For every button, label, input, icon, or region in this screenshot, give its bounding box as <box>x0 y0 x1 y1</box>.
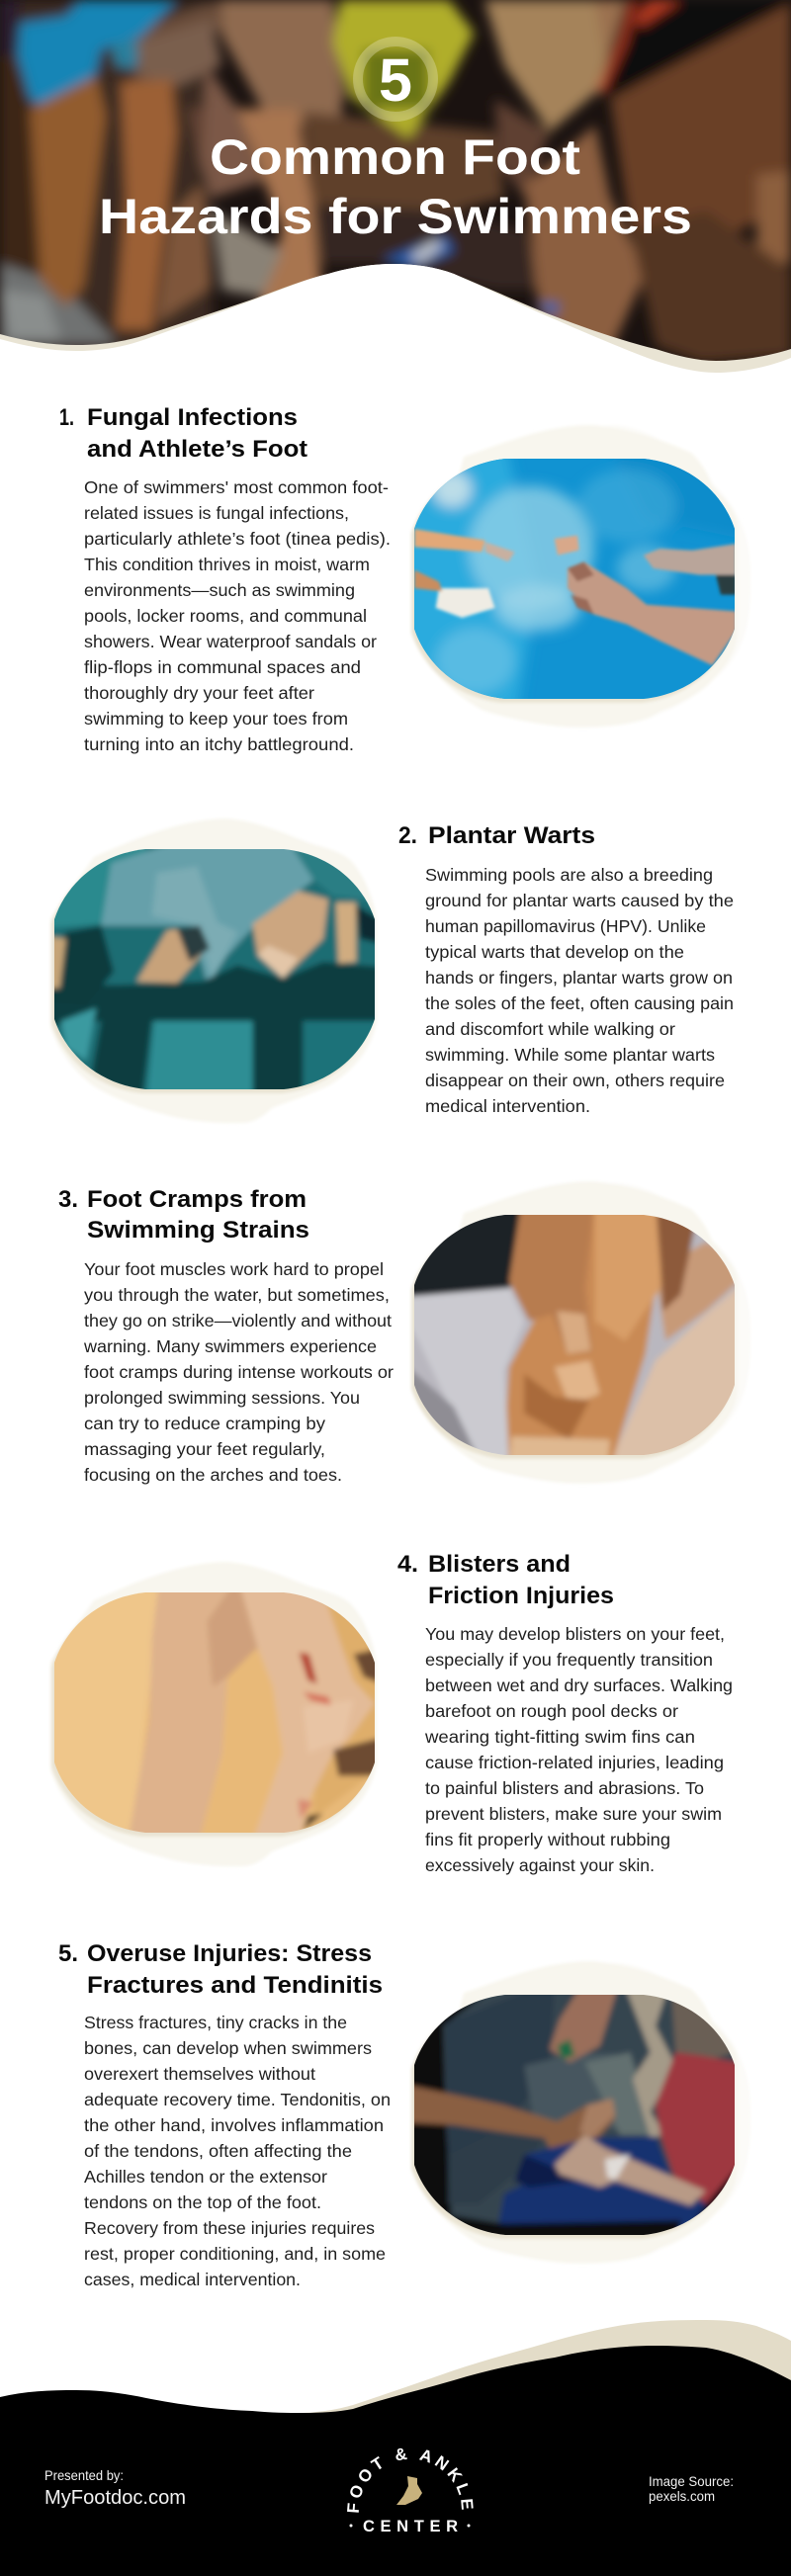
image backdrop blob <box>50 1562 377 1866</box>
image backdrop blob <box>411 1961 750 2264</box>
number badge: 5 <box>379 46 412 114</box>
heading: 2. <box>398 822 417 849</box>
photo: legs with heel wound <box>54 1592 375 1833</box>
body text: adequate recovery time. Tendonitis, on <box>84 2090 391 2109</box>
body text: ground for plantar warts caused by the <box>425 891 734 910</box>
body text: medical intervention. <box>425 1096 590 1116</box>
body text: fins fit properly without rubbing <box>425 1830 670 1849</box>
body text: the soles of the feet, often causing pain <box>425 993 734 1013</box>
body text: to painful blisters and abrasions. To <box>425 1778 704 1798</box>
body text: particularly athlete’s foot (tinea pedis). <box>84 529 391 549</box>
body text <box>83 1259 394 1485</box>
body text: you through the water, but sometimes, <box>84 1285 390 1305</box>
body text: cause friction-related injuries, leading <box>425 1753 724 1772</box>
heading: Blisters and <box>428 1551 571 1578</box>
body text: Stress fractures, tiny cracks in the <box>84 2013 347 2032</box>
heading <box>397 1551 614 1609</box>
body text: barefoot on rough pool decks or <box>425 1701 678 1721</box>
body text: focusing on the arches and toes. <box>84 1465 342 1485</box>
panel: fungal infections <box>59 404 758 754</box>
body text: warning. Many swimmers experience <box>83 1336 377 1356</box>
image source <box>649 2473 734 2504</box>
body text: cases, medical intervention. <box>84 2270 301 2289</box>
heading <box>58 1940 383 1999</box>
heading: Foot Cramps from <box>87 1186 307 1213</box>
logo arc text: FOOT & ANKLE <box>347 2447 474 2513</box>
image source: pexels.com <box>649 2488 715 2504</box>
cream wave edge <box>0 264 791 395</box>
body text: Recovery from these injuries requires <box>84 2218 375 2238</box>
body text: related issues is fungal infections, <box>84 503 349 523</box>
header banner <box>0 0 791 395</box>
number badge <box>358 42 433 117</box>
body text: typical warts that develop on the <box>425 942 684 962</box>
panel: blisters <box>36 1551 733 1875</box>
body text: wearing tight-fitting swim fins can <box>424 1727 695 1747</box>
body text: between wet and dry surfaces. Walking <box>425 1675 733 1695</box>
body text: Your foot muscles work hard to propel <box>84 1259 384 1279</box>
black wave background <box>0 2346 791 2576</box>
image backdrop blob <box>411 425 750 728</box>
heading: and Athlete’s Foot <box>87 436 308 463</box>
heading: Plantar Warts <box>428 822 595 849</box>
heading: 1. <box>59 404 74 431</box>
body text: showers. Wear waterproof sandals or <box>84 632 377 651</box>
icon: foot <box>396 2476 422 2505</box>
body text: swimming to keep your toes from <box>84 709 348 729</box>
body text <box>84 2013 391 2289</box>
presented by: MyFootdoc.com <box>44 2487 186 2509</box>
body text: human papillomavirus (HPV). Unlike <box>425 916 706 936</box>
cream wave <box>297 2320 791 2576</box>
body text: foot cramps during intense workouts or <box>84 1362 394 1382</box>
photo: ankle being treated with spray <box>414 1995 735 2235</box>
heading: Swimming Strains <box>87 1217 309 1244</box>
body text: prevent blisters, make sure your swim <box>425 1804 722 1824</box>
body text: hands or fingers, plantar warts grow on <box>425 968 733 987</box>
body text: overexert themselves without <box>84 2064 315 2084</box>
body text: You may develop blisters on your feet, <box>425 1624 725 1644</box>
body text: Swimming pools are also a breeding <box>425 865 713 885</box>
presented by <box>44 2467 186 2509</box>
body text: massaging your feet regularly, <box>84 1439 325 1459</box>
body text: pools, locker rooms, and communal <box>84 606 367 626</box>
body text: especially if you frequently transition <box>425 1650 713 1670</box>
body text: flip-flops in communal spaces and <box>84 657 361 677</box>
body text: bones, can develop when swimmers <box>84 2038 372 2058</box>
image source: Image Source: <box>649 2473 734 2489</box>
image backdrop blob <box>50 818 377 1123</box>
body text: This condition thrives in moist, warm <box>84 555 370 574</box>
heading: Fungal Infections <box>87 404 298 431</box>
body text: of the tendons, often affecting the <box>84 2141 352 2161</box>
heading: Fractures and Tendinitis <box>87 1972 383 1999</box>
heading: Friction Injuries <box>428 1583 614 1609</box>
body text <box>425 865 734 1116</box>
panel: overuse injuries <box>58 1940 756 2289</box>
body text: the other hand, involves inflammation <box>84 2115 384 2135</box>
body text: swimming. While some plantar warts <box>425 1045 715 1065</box>
panel: foot cramps <box>58 1181 756 1485</box>
body text: they go on strike—violently and without <box>84 1311 392 1331</box>
title: Common Foot <box>210 129 580 185</box>
title: Hazards for Swimmers <box>99 189 692 244</box>
heading: Overuse Injuries: Stress <box>87 1940 372 1967</box>
heading: 3. <box>58 1186 78 1213</box>
photo: foot massage <box>414 1215 735 1455</box>
panel: plantar warts <box>36 818 734 1123</box>
body text <box>424 1624 733 1875</box>
presented by: Presented by: <box>44 2467 124 2483</box>
header photo: swimmers on starting blocks <box>0 0 791 395</box>
heading <box>58 1186 309 1244</box>
heading: 4. <box>397 1551 418 1578</box>
photo: feet underwater <box>54 849 375 1089</box>
white wave <box>0 264 791 395</box>
body text: Achilles tendon or the extensor <box>84 2167 327 2187</box>
body text: One of swimmers' most common foot- <box>84 477 389 497</box>
body text: prolonged swimming sessions. You <box>84 1388 360 1408</box>
body text: can try to reduce cramping by <box>84 1414 325 1433</box>
body text: environments—such as swimming <box>84 580 355 600</box>
body text: and discomfort while walking or <box>425 1019 675 1039</box>
footer <box>0 2320 791 2576</box>
logo: foot and ankle center <box>347 2447 474 2535</box>
title <box>99 129 692 244</box>
photo: feet splashing in pool <box>414 459 735 699</box>
body text: thoroughly dry your feet after <box>84 683 314 703</box>
body text: rest, proper conditioning, and, in some <box>84 2244 386 2264</box>
body text: disappear on their own, others require <box>425 1071 725 1090</box>
body text <box>84 477 391 754</box>
heading: 5. <box>58 1940 78 1967</box>
body text: tendons on the top of the foot. <box>84 2192 321 2212</box>
logo center word: CENTER <box>363 2518 458 2535</box>
heading <box>59 404 308 463</box>
body text: turning into an itchy battleground. <box>84 734 354 754</box>
logo dots <box>350 2525 471 2527</box>
body text: excessively against your skin. <box>425 1855 655 1875</box>
image backdrop blob <box>411 1181 750 1484</box>
